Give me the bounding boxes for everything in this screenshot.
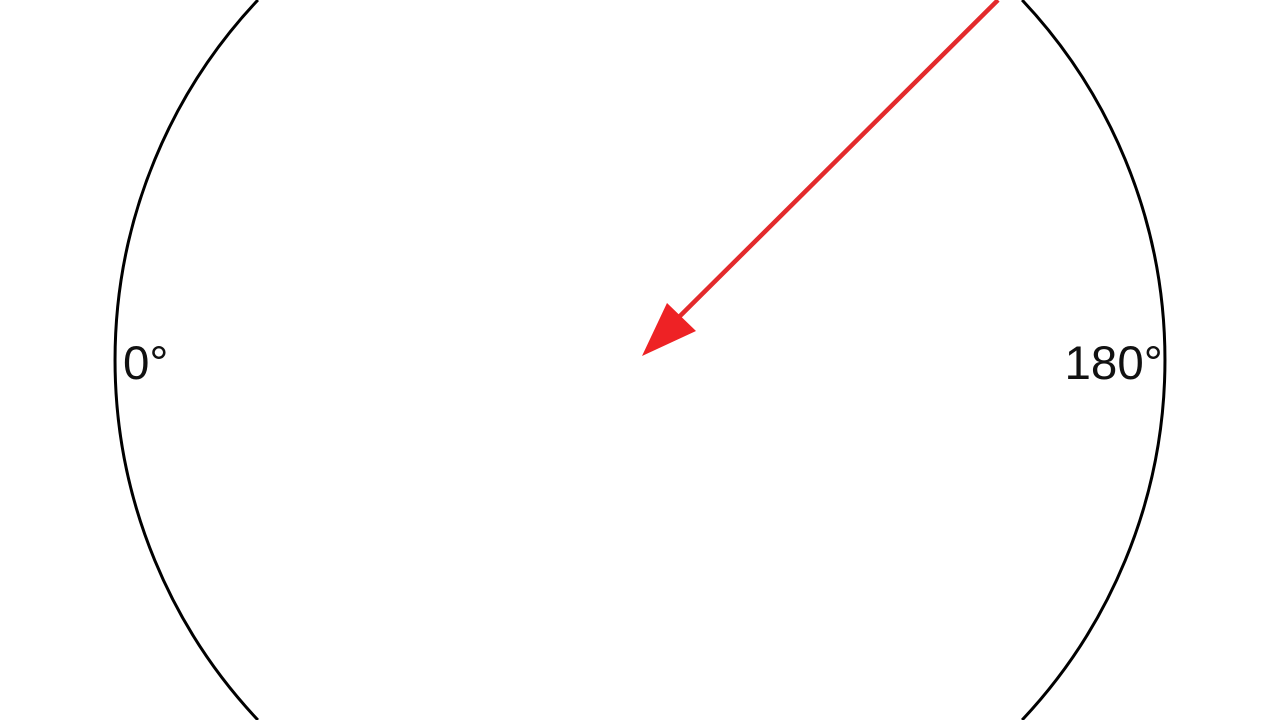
label: 180 degrees: 180° [1064, 337, 1163, 390]
label: 0 degrees: 0° [123, 337, 168, 390]
red arrow [642, 0, 998, 356]
